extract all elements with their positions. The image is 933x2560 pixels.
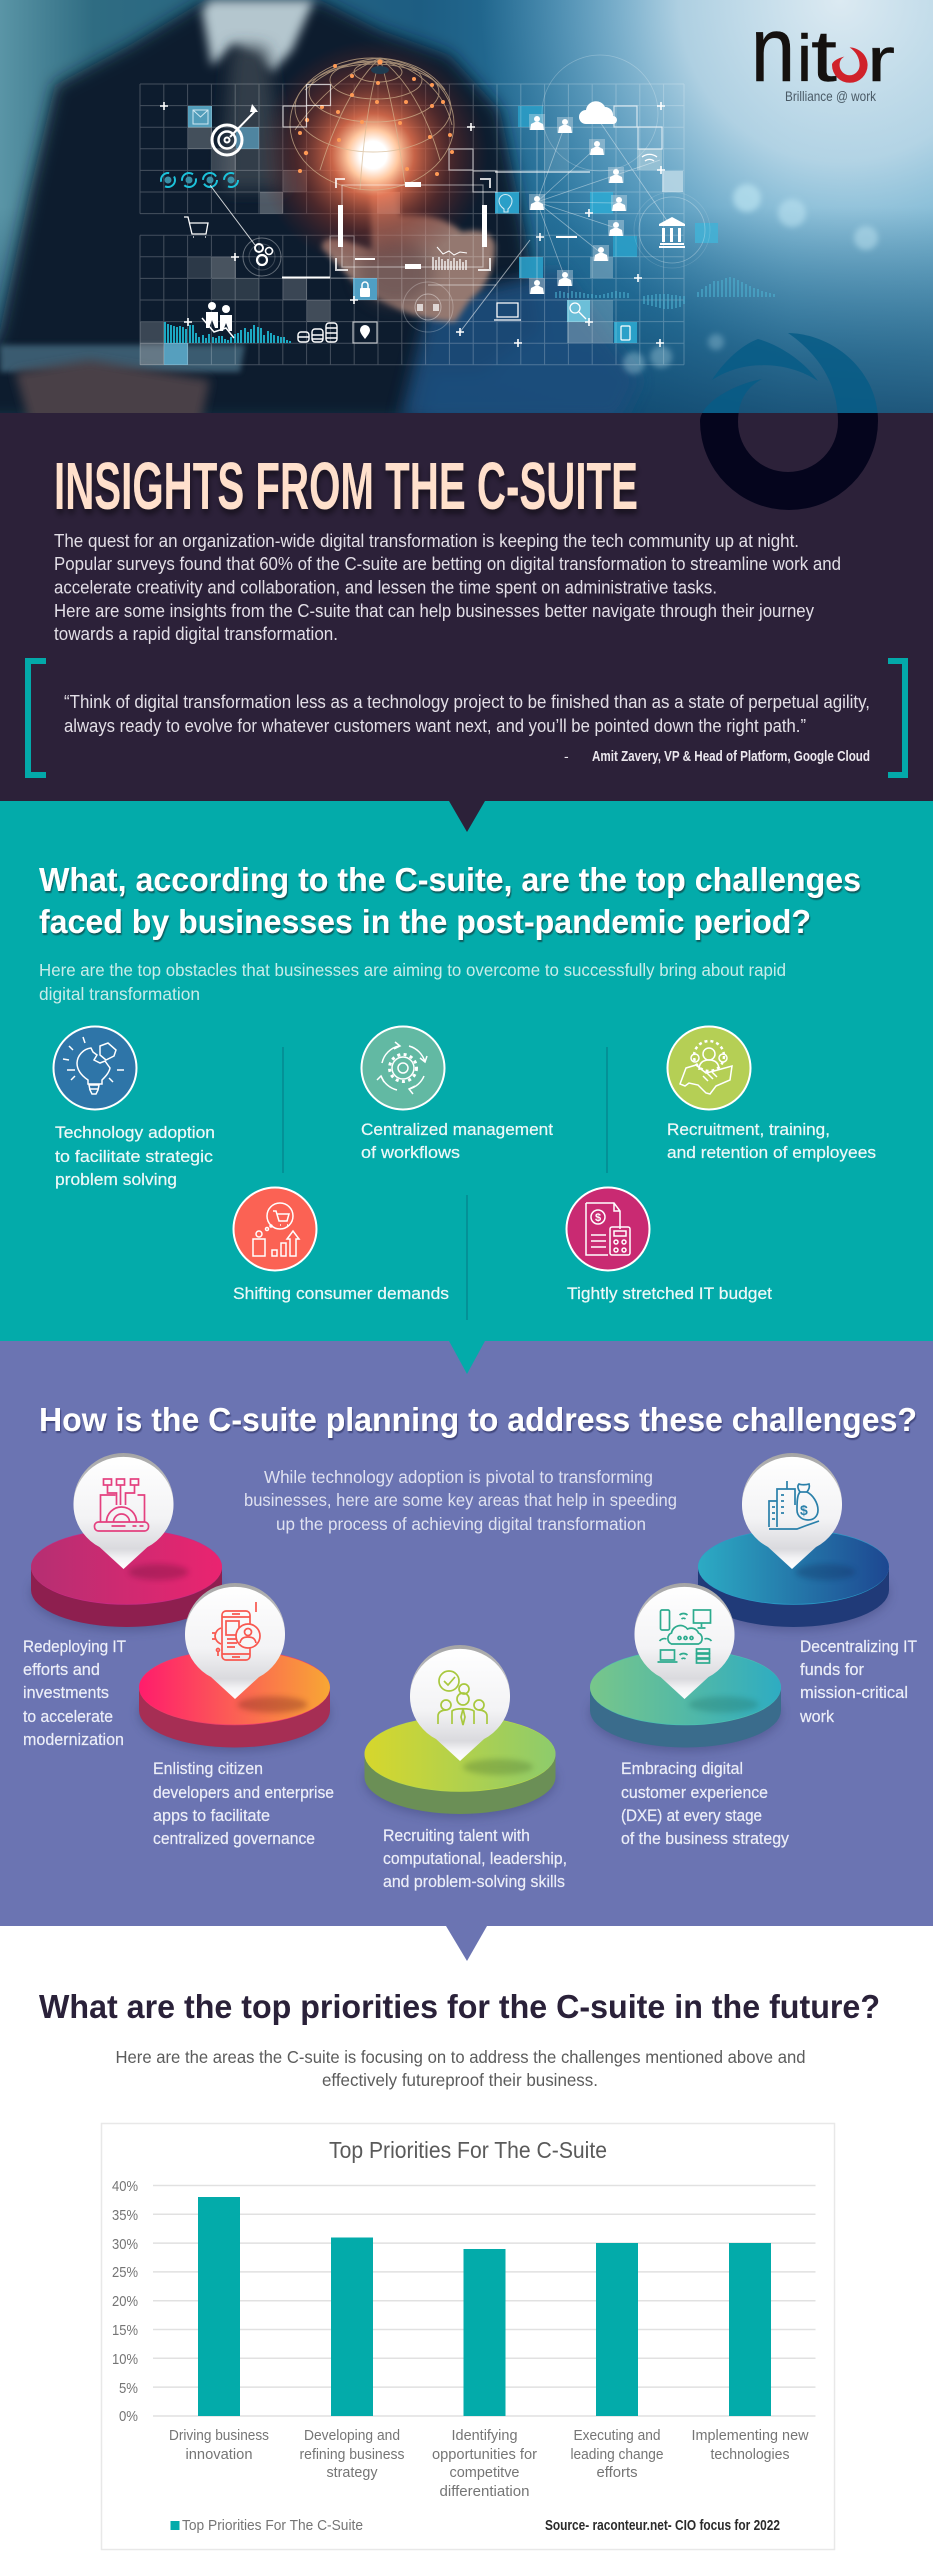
callout: quote with teal brackets: “Think of digital transformation less as a technology project to be finished than as a state of perpetual agility, <box>64 692 870 712</box>
icon: target with arrow <box>212 104 258 155</box>
step: decentralizing IT funds <box>698 1529 917 1726</box>
icon: gear with arrows <box>362 1026 444 1110</box>
heading: priorities: What are the top priorities for the C-suite in the future? <box>39 1988 880 2025</box>
text block: priorities intro: Here are the areas the C-suite is focusing on to address the challenges mentioned above and <box>116 2047 806 2067</box>
intro paragraph <box>54 531 841 644</box>
network: connection lines <box>537 55 710 286</box>
x axis labels: Executing and <box>574 2427 660 2444</box>
heading: top challenges: What, according to the C-suite, are the top challenges <box>39 861 861 898</box>
x axis labels: Developing and <box>304 2427 400 2444</box>
text: redeploying IT: efforts and <box>23 1661 100 1679</box>
icon: shopping cart <box>184 217 208 237</box>
challenge: centralized management <box>361 1026 553 1162</box>
text: decentralizing: work <box>799 1708 835 1726</box>
challenge: centralized management: of workflows <box>361 1144 460 1162</box>
panel: dark intro <box>0 413 933 801</box>
diagonal line <box>460 240 530 332</box>
text: enlisting: centralized governance <box>153 1830 315 1848</box>
heading: top challenges <box>39 861 861 940</box>
cyan bar chart <box>165 322 290 343</box>
challenge: shifting demands <box>233 1188 449 1303</box>
y axis labels: 15% <box>112 2322 138 2339</box>
icon: running business people <box>202 302 234 338</box>
panel: hero photo <box>0 0 933 425</box>
step: redeploying IT <box>23 1529 222 1749</box>
arrow: dark notch <box>449 801 485 832</box>
challenge: IT budget <box>566 1188 772 1303</box>
x axis labels: Driving business <box>169 2427 269 2444</box>
text block: challenges intro: digital transformation <box>39 984 200 1004</box>
challenge: recruitment: Recruitment, training, <box>667 1121 830 1139</box>
icon: puzzle lightbulb <box>54 1026 136 1110</box>
challenge: recruitment <box>667 1026 876 1162</box>
text: recruiting: computational, leadership, <box>383 1850 567 1868</box>
bar chart <box>102 2124 834 2550</box>
y axis labels: 5% <box>119 2380 138 2397</box>
x axis labels: opportunities for <box>432 2446 537 2463</box>
logo: Nitor: t <box>811 17 837 97</box>
pin: connected devices icon <box>634 1583 734 1699</box>
text: decentralizing <box>799 1638 917 1726</box>
text: embracing: (DXE) at every stage <box>621 1807 762 1825</box>
x axis labels: Identifying <box>452 2427 518 2444</box>
text: decentralizing: mission-critical <box>800 1684 908 1702</box>
audio wave bars <box>556 277 774 309</box>
logo: Nitor: n <box>751 0 795 101</box>
challenge: technology adoption: to facilitate strategic <box>55 1148 213 1166</box>
challenge: IT budget: Tightly stretched IT budget <box>567 1285 772 1303</box>
white bars <box>282 182 577 278</box>
icon: envelope <box>193 110 208 124</box>
text: decentralizing: funds for <box>800 1661 864 1679</box>
panel: top challenges <box>0 801 933 1341</box>
gridlines <box>153 2186 816 2416</box>
y axis labels: 10% <box>112 2351 138 2368</box>
panel: priorities <box>0 1926 933 2560</box>
challenge: recruitment: and retention of employees <box>667 1144 876 1162</box>
heading: planning: How is the C-suite planning to address these challenges? <box>39 1401 917 1438</box>
pin: buildings and money bag icon <box>742 1453 842 1569</box>
pin: buildings and money bag icon: $ <box>800 1502 808 1518</box>
icon: padlock <box>360 282 370 297</box>
panel: planning <box>0 1341 933 1926</box>
decorative swirl mark, lower half on dark <box>700 413 878 510</box>
callout: quote with teal brackets <box>25 658 908 778</box>
text: enlisting <box>153 1760 334 1848</box>
intro paragraph: accelerate creativity and collaboration, and lessen the time spent on administrative tasks. <box>54 578 717 598</box>
x axis labels: strategy <box>326 2464 378 2481</box>
icon tiles over grid <box>140 106 718 365</box>
disc: magenta <box>30 1529 222 1631</box>
icon: coin stacks <box>298 323 337 342</box>
challenge: shifting demands: Shifting consumer demands <box>233 1285 449 1303</box>
network: person tiles <box>529 114 627 294</box>
icons: four cyan dials <box>161 173 238 187</box>
text: recruiting: Recruiting talent with <box>383 1827 530 1845</box>
y axis labels: 40% <box>112 2178 138 2195</box>
intro paragraph: towards a rapid digital transformation. <box>54 624 338 644</box>
heading: top challenges: faced by businesses in the post-pandemic period? <box>39 903 811 940</box>
targeting frame and outlined squares <box>283 84 662 343</box>
y axis labels: 20% <box>112 2293 138 2310</box>
decorative swirl mark, upper half on photo <box>702 333 878 413</box>
text: redeploying IT: modernization <box>23 1731 124 1749</box>
challenge: technology adoption <box>54 1026 215 1189</box>
text block: challenges intro <box>39 960 786 1004</box>
source note: Source- raconteur.net- CIO focus for 2022 <box>545 2518 780 2534</box>
blurred executive suit <box>0 0 640 425</box>
intro paragraph: The quest for an organization-wide digital transformation is keeping the tech community up at night. <box>54 531 799 551</box>
text: recruiting <box>383 1827 567 1891</box>
icon: laptop <box>494 303 521 320</box>
text: enlisting: Enlisting citizen <box>153 1760 263 1778</box>
x axis labels: technologies <box>710 2446 790 2463</box>
icon: wifi <box>642 154 657 161</box>
step: recruiting talent <box>364 1716 567 1891</box>
callout: quote with teal brackets: Amit Zavery, VP & Head of Platform, Google Cloud <box>592 749 870 765</box>
icon: palm chart <box>433 247 467 270</box>
text: embracing <box>621 1760 790 1848</box>
icon: cart speech bubble <box>234 1188 316 1270</box>
y axis labels <box>112 2178 138 2425</box>
icon: bank <box>659 217 685 248</box>
text: embracing: Embracing digital <box>621 1760 743 1778</box>
arrow: purple notch <box>446 1926 487 1961</box>
intro paragraph: Popular surveys found that 60% of the C-suite are betting on digital transformation to streamline work and <box>54 554 841 574</box>
disc: coral to orange <box>138 1650 330 1752</box>
icon: gears with connector <box>210 185 281 276</box>
icon: magnifier <box>570 303 586 319</box>
x axis labels: Implementing new <box>692 2427 809 2444</box>
text block: priorities intro <box>116 2047 806 2090</box>
legend: Top Priorities For The C-Suite <box>182 2517 363 2534</box>
x axis labels: innovation <box>186 2446 252 2463</box>
x axis labels: efforts <box>596 2464 638 2481</box>
text block: planning intro: businesses, here are some key areas that help in speeding <box>244 1490 677 1510</box>
x axis labels <box>169 2427 809 2500</box>
icon: lightbulb <box>499 195 512 212</box>
text: embracing: of the business strategy <box>621 1830 790 1848</box>
x axis labels: differentiation <box>440 2483 530 2500</box>
y axis labels: 30% <box>112 2236 138 2253</box>
challenge: technology adoption: problem solving <box>55 1171 177 1189</box>
arrow: teal notch <box>449 1341 485 1374</box>
icon: invoice and calculator: $ <box>595 1212 601 1224</box>
logo: Nitor: r <box>867 26 895 95</box>
x axis labels: competitve <box>450 2464 520 2481</box>
intro paragraph: Here are some insights from the C-suite that can help businesses better navigate through their journey <box>54 601 814 621</box>
y axis labels: 25% <box>112 2264 138 2281</box>
disc: lime <box>364 1716 556 1818</box>
callout: quote with teal brackets: always ready to evolve for whatever customers want next, and you’ll be pointed down the right path.” <box>64 716 806 736</box>
step: embracing DXE <box>590 1650 790 1848</box>
x axis labels: leading change <box>570 2446 664 2463</box>
challenge: centralized management: Centralized management <box>361 1121 553 1139</box>
text block: planning intro <box>244 1467 677 1534</box>
bokeh lights <box>623 184 878 374</box>
bars <box>198 2197 771 2416</box>
text: redeploying IT: to accelerate <box>23 1708 113 1726</box>
icon: handshake with people <box>668 1026 750 1110</box>
text: embracing: customer experience <box>621 1784 768 1802</box>
text: recruiting: and problem-solving skills <box>383 1873 565 1891</box>
text: redeploying IT: Redeploying IT <box>23 1638 126 1656</box>
digital grid <box>140 84 684 365</box>
icon: location pin <box>360 325 370 339</box>
text block: priorities intro: effectively futureproof their business. <box>322 2070 598 2090</box>
logo: Nitor: i <box>797 21 812 95</box>
text: enlisting: developers and enterprise <box>153 1784 334 1802</box>
callout: quote with teal brackets: - <box>564 748 569 764</box>
text: redeploying IT: investments <box>23 1684 109 1702</box>
icon: palm circle <box>403 282 453 332</box>
text: enlisting: apps to facilitate <box>153 1807 270 1825</box>
pin: mobile app icon <box>185 1583 285 1699</box>
icon: glowing globe <box>266 46 482 263</box>
text block: planning intro: up the process of achieving digital transformation <box>276 1514 646 1534</box>
logo: Nitor: Brilliance @ work <box>785 88 877 104</box>
disc: blue <box>698 1529 890 1631</box>
blurred hand and finger <box>318 182 499 326</box>
dividers <box>283 1047 607 1320</box>
text block: challenges intro: Here are the top obstacles that businesses are aiming to overcome to successfully bring about rapid <box>39 960 786 980</box>
chart title: Top Priorities For The C-Suite <box>329 2137 607 2163</box>
x axis labels: refining business <box>300 2446 404 2463</box>
logo: Nitor <box>751 0 895 104</box>
pin: team with checkmark icon <box>410 1645 510 1761</box>
text: redeploying IT <box>23 1638 126 1749</box>
icon: invoice and calculator <box>566 1188 650 1270</box>
pin: laptop gear icon <box>74 1453 174 1569</box>
y axis labels: 0% <box>119 2408 138 2425</box>
text: decentralizing: Decentralizing IT <box>800 1638 917 1656</box>
disc: green to cyan <box>590 1650 782 1752</box>
step: enlisting citizen developers <box>138 1650 334 1848</box>
challenge: technology adoption: Technology adoption <box>55 1124 215 1142</box>
y axis labels: 35% <box>112 2207 138 2224</box>
plus markers <box>160 102 665 347</box>
text block: planning intro: While technology adoption is pivotal to transforming <box>264 1467 653 1487</box>
icon: phone <box>621 326 630 340</box>
icon: cloud <box>579 101 617 124</box>
